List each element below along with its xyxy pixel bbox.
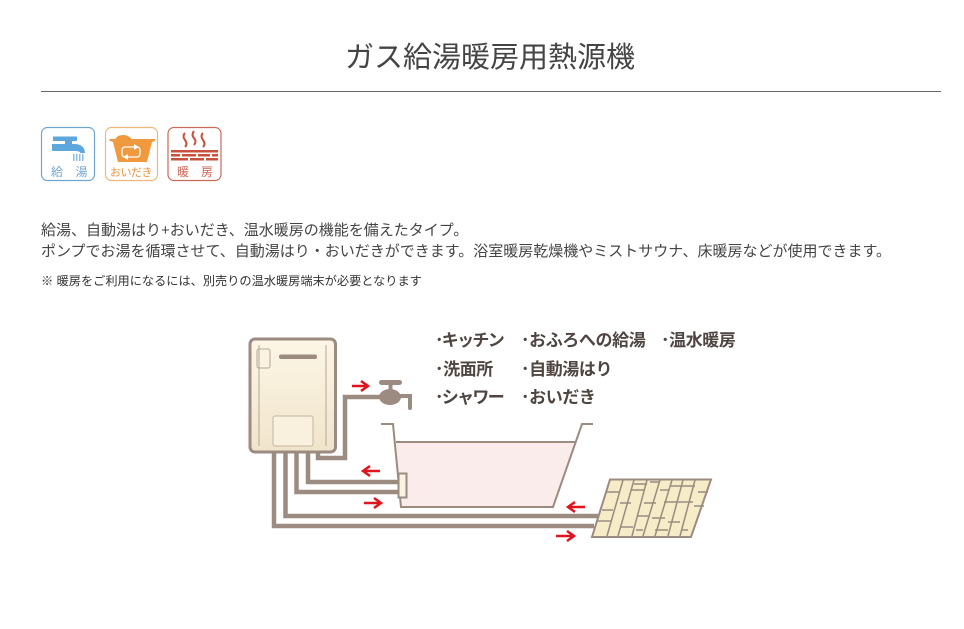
icon: reheating bath <box>106 128 158 180</box>
description text: 給湯、自動湯はり+おいだき、温水暖房の機能を備えたタイプ。 <box>41 222 468 239</box>
icon: hot water supply: 給 <box>51 165 63 179</box>
supply labels: ･洗面所 <box>435 360 493 379</box>
supply labels: ･シャワー <box>435 388 504 407</box>
description text <box>41 222 891 260</box>
bathtub <box>381 424 593 507</box>
water heater <box>250 339 336 452</box>
icon: floor heating <box>168 128 221 180</box>
flow arrows <box>352 381 585 541</box>
system diagram <box>248 331 736 542</box>
icon: reheating bath: おいだき <box>110 166 152 179</box>
pipes <box>274 397 598 526</box>
icon: floor heating: 暖 <box>177 165 189 179</box>
title rule <box>41 91 941 92</box>
supply labels: ･おふろへの給湯 <box>521 331 646 350</box>
supply labels <box>435 331 736 407</box>
icon: floor heating: 房 <box>201 165 213 179</box>
icon: hot water supply <box>42 128 94 180</box>
description text: ポンプでお湯を循環させて、自動湯はり・おいだきができます。浴室暖房乾燥機やミストサウナ、床暖房などが使用できます。 <box>41 243 891 260</box>
icon: hot water supply: 湯 <box>76 165 88 179</box>
title: ガス給湯暖房用熱源機 <box>345 42 635 74</box>
feature icons <box>40 126 222 182</box>
supply labels: ･自動湯はり <box>521 359 612 379</box>
supply labels: ･温水暖房 <box>661 331 736 350</box>
supply labels: ･おいだき <box>521 388 596 407</box>
supply labels: ･キッチン <box>435 331 504 350</box>
floor heating panel <box>592 480 711 537</box>
note: ※ 暖房をご利用になるには、別売りの温水暖房端末が必要となります <box>41 274 422 288</box>
faucet <box>379 380 412 410</box>
